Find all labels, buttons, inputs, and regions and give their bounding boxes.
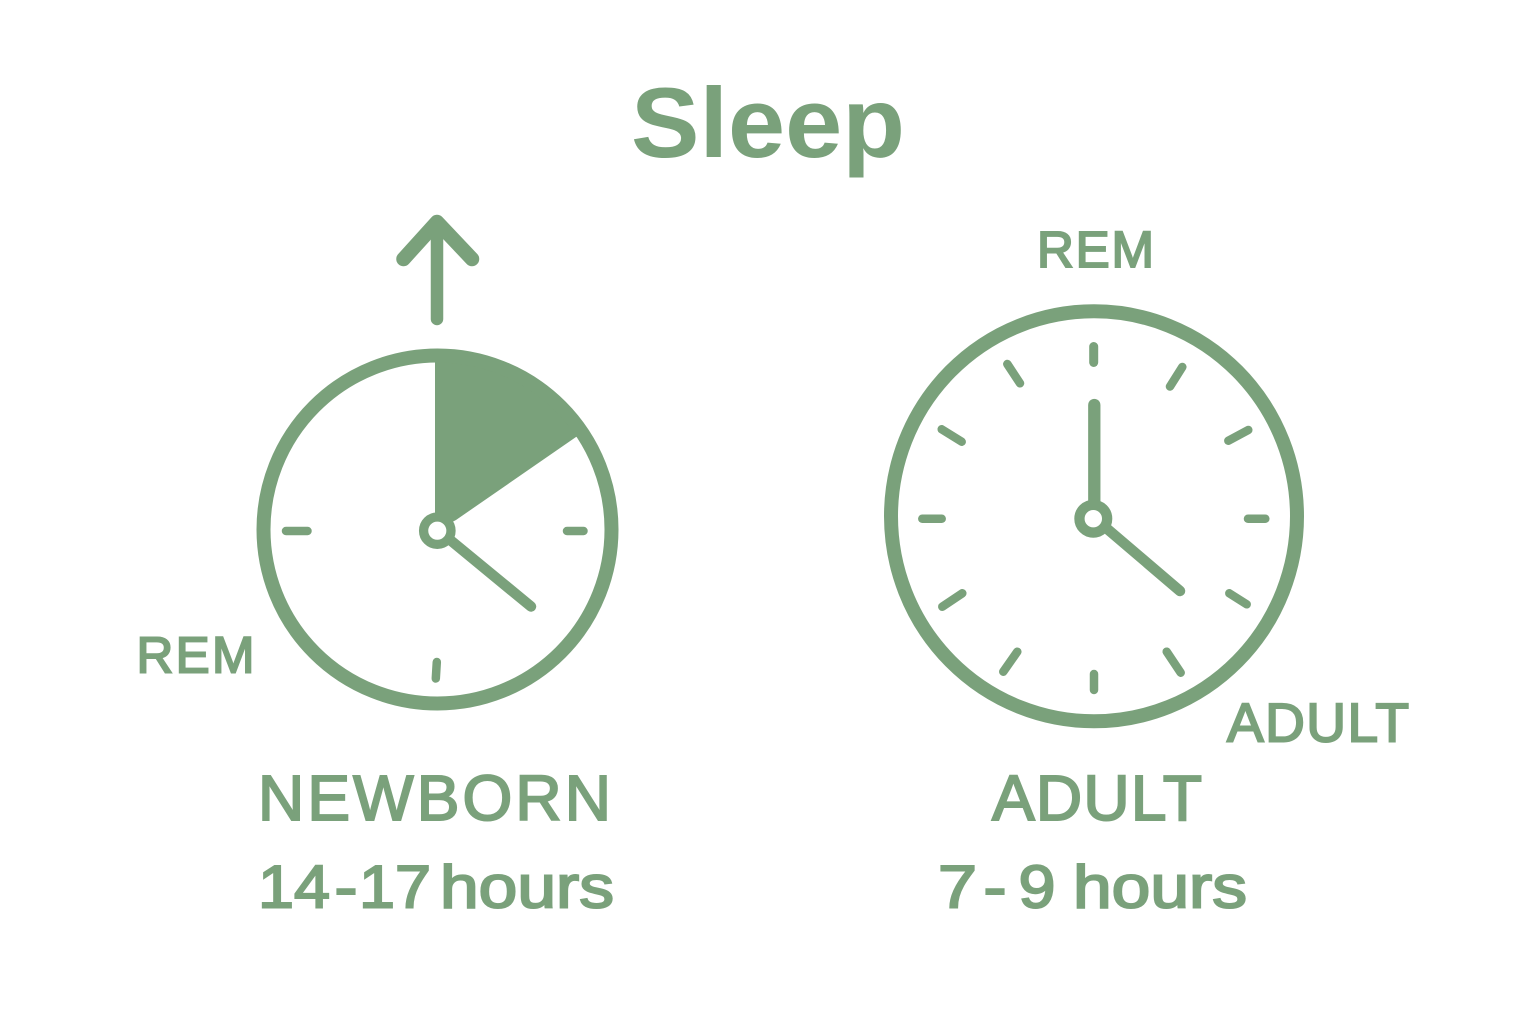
label: adult hours: 7: [938, 854, 977, 920]
clock hand: [449, 539, 531, 606]
ticks: [286, 531, 584, 678]
REM wedge: [435, 356, 582, 531]
newborn clock: [264, 356, 612, 704]
center hub: [424, 517, 451, 544]
label: adult hours: hours: [1073, 854, 1247, 920]
title: Sleep: [631, 67, 905, 178]
ticks: [922, 346, 1265, 690]
label: NEWBORN: NEWBORN: [258, 762, 611, 834]
label: newborn hours: hours: [440, 854, 614, 920]
label: REM adult: REM: [1037, 221, 1154, 278]
clock face: [264, 356, 612, 704]
label: REM newborn: REM: [136, 626, 254, 684]
label: ADULT: ADULT: [992, 762, 1202, 834]
label: newborn hours: 14: [258, 854, 330, 920]
label: ADULT by clock: ADULT: [1227, 692, 1409, 754]
icon: up arrow: [404, 222, 472, 319]
label: adult hours: 9: [1018, 854, 1056, 920]
clock hands: [1094, 405, 1180, 591]
label: newborn hours: 17: [359, 854, 431, 920]
label: adult hours: -: [984, 854, 1006, 920]
adult clock: [891, 311, 1297, 721]
label: newborn hours: -: [334, 854, 358, 920]
center hub: [1079, 505, 1107, 533]
clock face: [891, 311, 1297, 721]
